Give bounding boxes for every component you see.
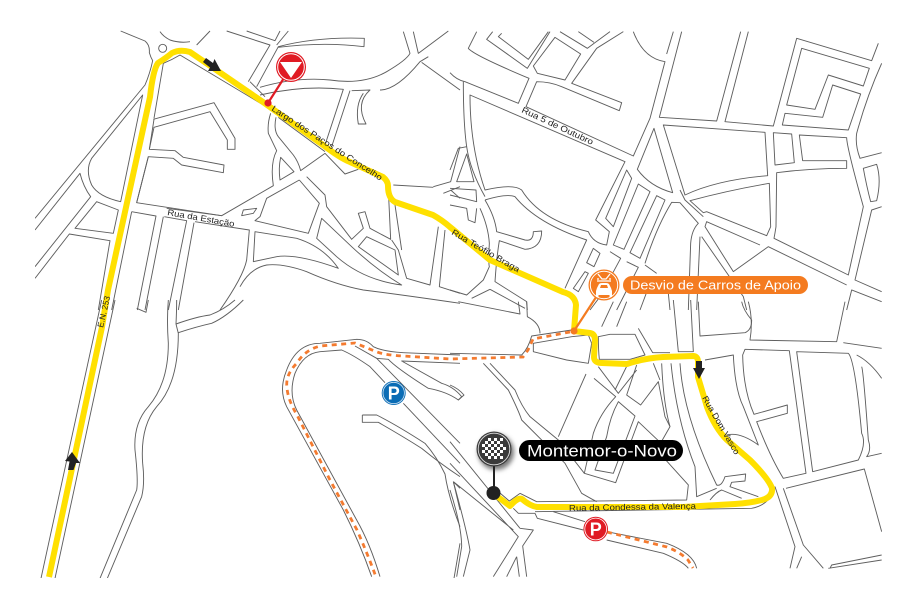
marker: parking blue <box>382 381 406 405</box>
arrow: direction Rua Dom Vasco <box>693 361 705 379</box>
icon: chequered pattern <box>482 438 506 459</box>
label: Rua Dom Vasco: Rua Dom Vasco <box>700 394 742 456</box>
label: Largo dos Paços do Concelho: Largo dos Paços do Concelho <box>270 103 385 183</box>
label: Desvio de Carros de Apoio: Desvio de Carros de Apoio <box>630 278 801 292</box>
label: Montemor-o-Novo: Montemor-o-Novo <box>527 442 677 460</box>
dashed parking access road <box>607 532 693 568</box>
marker: finish, chequered flag <box>476 432 514 500</box>
dashed support car detour <box>287 332 570 577</box>
arrow: direction EN 253 <box>65 452 80 470</box>
label: Desvio de Carros de Apoio <box>623 276 808 294</box>
icon: support car <box>596 274 612 297</box>
label: Rua da Estação: Rua da Estação <box>167 207 236 229</box>
marker: support car detour <box>570 270 620 335</box>
marker: parking red: P <box>590 520 602 540</box>
label: Rua da Condessa da Valença: Rua da Condessa da Valença <box>569 501 696 513</box>
label: Rua 5 de Outubro: Rua 5 de Outubro <box>520 105 595 147</box>
marker: parking blue: P <box>388 384 400 404</box>
yellow race route <box>49 51 772 577</box>
arrow: direction Largo dos Paços <box>203 58 221 71</box>
label: E.N. 253: E.N. 253 <box>95 295 112 328</box>
label: Rua Teófilo Braga: Rua Teófilo Braga <box>450 227 522 274</box>
marker: parking red <box>583 517 608 541</box>
marker: start, red triangle <box>264 52 306 107</box>
